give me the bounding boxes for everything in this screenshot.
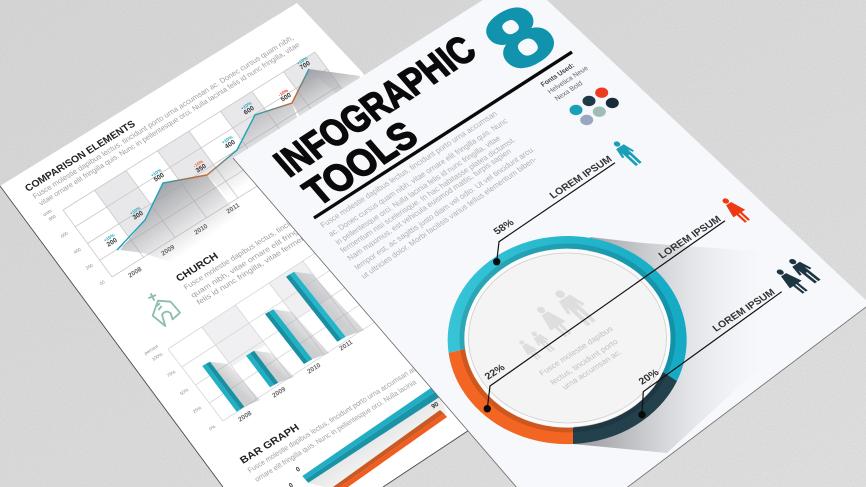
x axis labels (127, 202, 241, 280)
segment: 20% dark (573, 372, 677, 444)
title underline (314, 52, 572, 218)
callout: 58%: 58% (492, 217, 517, 237)
icon: man teal (609, 138, 645, 168)
text block: donut centre: Fusce molestie dapibus (537, 324, 615, 378)
text block: donut centre: urna accumsan ac. (560, 348, 623, 392)
data labels: +10% (129, 206, 141, 216)
x axis labels: 2009 (160, 244, 177, 258)
data labels (103, 56, 312, 249)
y axis labels: 600 (60, 230, 69, 239)
bar: 2009 (246, 351, 294, 387)
donut centre (464, 249, 670, 427)
segment: 22% orange (449, 349, 573, 444)
y axis labels: 100% (151, 352, 163, 362)
callout: 58% (492, 154, 615, 265)
text block: church description: quam nibh, vitae ornare elit fringilla quis. Nunc in pellentesque (189, 166, 398, 300)
title: TOOLS (295, 114, 426, 214)
y axis labels: 25% (192, 405, 202, 414)
y axis labels (42, 208, 106, 286)
figure: woman (531, 303, 576, 340)
data labels: 500 (280, 92, 293, 104)
text block: intro: Fusce molestie dapibus lectus, tincidunt porto urna accumsan (318, 109, 499, 230)
horizontal bars (288, 368, 467, 487)
colour palette (570, 88, 619, 125)
text block: intro: in pellentesque orci. Nulla lacinia felis id nunc fringilla, vitae (333, 134, 503, 247)
text block: intro: tempor est, ac sagittis justo diam vel odio. Ut vel tincidunt arcu. (352, 145, 537, 272)
text block: intro: ac. Donec cursus quam nibh, vitae ornare elit fringilla quis. Nunc (326, 117, 510, 239)
y axis labels: percent (144, 343, 160, 356)
data labels: 400 (224, 139, 237, 151)
bar value labels (288, 401, 440, 487)
bar: teal (302, 368, 467, 483)
donut chart (448, 236, 687, 444)
panel: back sheet (0, 3, 560, 487)
data labels: +10% (296, 56, 308, 66)
y axis labels: 200 (85, 262, 94, 271)
icon: woman red (718, 195, 753, 225)
text block: church description: felis id nunc fringilla, vitae fermentum nisi scelerisque habitasse (195, 173, 404, 307)
x axis labels: 2010 (193, 223, 210, 237)
text: fonts used: Helvetica Neue (547, 65, 590, 96)
data labels: +10% (221, 135, 233, 145)
data labels: +10% (240, 101, 252, 111)
bar: orange (333, 410, 447, 487)
bar: 2008 (202, 362, 260, 412)
text block: bar graph description: ornare elit fringilla quis. Nunc in pellentesque orci. Nulla lacinia (253, 377, 419, 484)
text block: comparison description: vitae ornare elit fringilla quis. Nunc in pellentesque orci. Nulla lacinia felis id nunc fringilla, vitae (37, 40, 301, 208)
icon: couple dark (772, 256, 824, 296)
callout: 22%: 22% (483, 362, 508, 382)
figure: man (548, 286, 600, 329)
figure: woman (772, 266, 811, 296)
text block: intro: fermentum nisi scelerisque. In hac habitasse platea dictumst. (338, 135, 517, 255)
figure: girl (515, 338, 544, 362)
data labels: +10% (150, 168, 162, 178)
bar: 2010 (265, 309, 329, 364)
figure: man (784, 256, 824, 285)
x axis labels: 2010 (306, 362, 323, 376)
y axis labels: 00 (99, 279, 106, 286)
callout: 58%: LOREM IPSUM (548, 154, 615, 201)
y axis labels: 800 (48, 213, 57, 222)
callout: 20% (637, 287, 782, 418)
x axis labels: 2009 (271, 386, 288, 400)
bar value labels: 0 (295, 466, 302, 474)
data labels: 350 (195, 163, 208, 175)
line chart (42, 52, 364, 286)
bar chart (144, 248, 378, 432)
x axis labels: 2011 (225, 202, 241, 215)
text block: donut centre: lectus, tincidunt porto (548, 337, 620, 387)
segment: 58% teal (448, 236, 687, 381)
icon: church (148, 293, 180, 326)
figure: boy (527, 329, 558, 354)
text: fonts used: Fonts Used: (540, 63, 576, 89)
callout: 20%: 20% (637, 367, 662, 387)
x axis labels: 2011 (338, 339, 354, 352)
data labels: -10% (277, 88, 289, 98)
text block: donut centre (537, 324, 623, 392)
x axis labels: 2008 (237, 410, 254, 424)
x axis labels (237, 339, 354, 424)
y axis labels: 400 (73, 246, 82, 255)
text block: intro (318, 109, 539, 281)
panel: front sheet (233, 0, 866, 487)
bar value labels: 90 (430, 401, 440, 411)
text block: intro: ut ultricies dolor. Morbi facilisis varius tellus elementum biben- (359, 155, 539, 281)
heading: comparison elements: COMPARISON ELEMENTS (23, 119, 138, 194)
data labels: 300 (132, 210, 145, 222)
callout: 20%: LOREM IPSUM (711, 287, 778, 334)
title: INFOGRAPHIC (266, 28, 485, 185)
text: fonts used: Nexa Bold (554, 80, 584, 103)
data labels: 500 (153, 172, 166, 184)
text block: bar graph description: Fusce molestie dapibus lectus, tincidunt porto urna accumsan ac. (246, 363, 420, 475)
x axis labels: 2008 (127, 266, 144, 280)
ring drop shadow (573, 237, 800, 453)
heading: church: CHURCH (174, 251, 221, 284)
bar: 2011 (286, 272, 364, 342)
text: fonts used (540, 63, 590, 103)
text block: church description: Fusce molestie dapibus lectus, tincidunt porto urna accumsan ac. Donec (182, 153, 400, 292)
y axis labels: units (42, 208, 53, 217)
text block: intro: Nam maximus, est vehicula euismod mattis, turpis sapien (345, 147, 513, 263)
data labels: 200 (106, 237, 119, 249)
data labels: -10% (192, 159, 204, 169)
callout: 22% (483, 214, 725, 412)
y axis labels: 50% (179, 387, 189, 396)
y axis labels: 75% (166, 369, 176, 378)
title (266, 28, 485, 214)
y axis labels (144, 343, 216, 432)
heading: bar graph: BAR GRAPH (238, 422, 302, 466)
data labels: +10% (103, 233, 115, 243)
data labels: 700 (299, 60, 312, 72)
data labels: 600 (243, 105, 256, 117)
callout: 22%: LOREM IPSUM (657, 214, 724, 261)
icon: family (515, 286, 600, 362)
y axis labels: 0% (208, 424, 216, 432)
text block: comparison description: Fusce molestie dapibus lectus, tincidunt porto urna accumsan ac. Donec cursus quam nibh, (31, 33, 295, 201)
